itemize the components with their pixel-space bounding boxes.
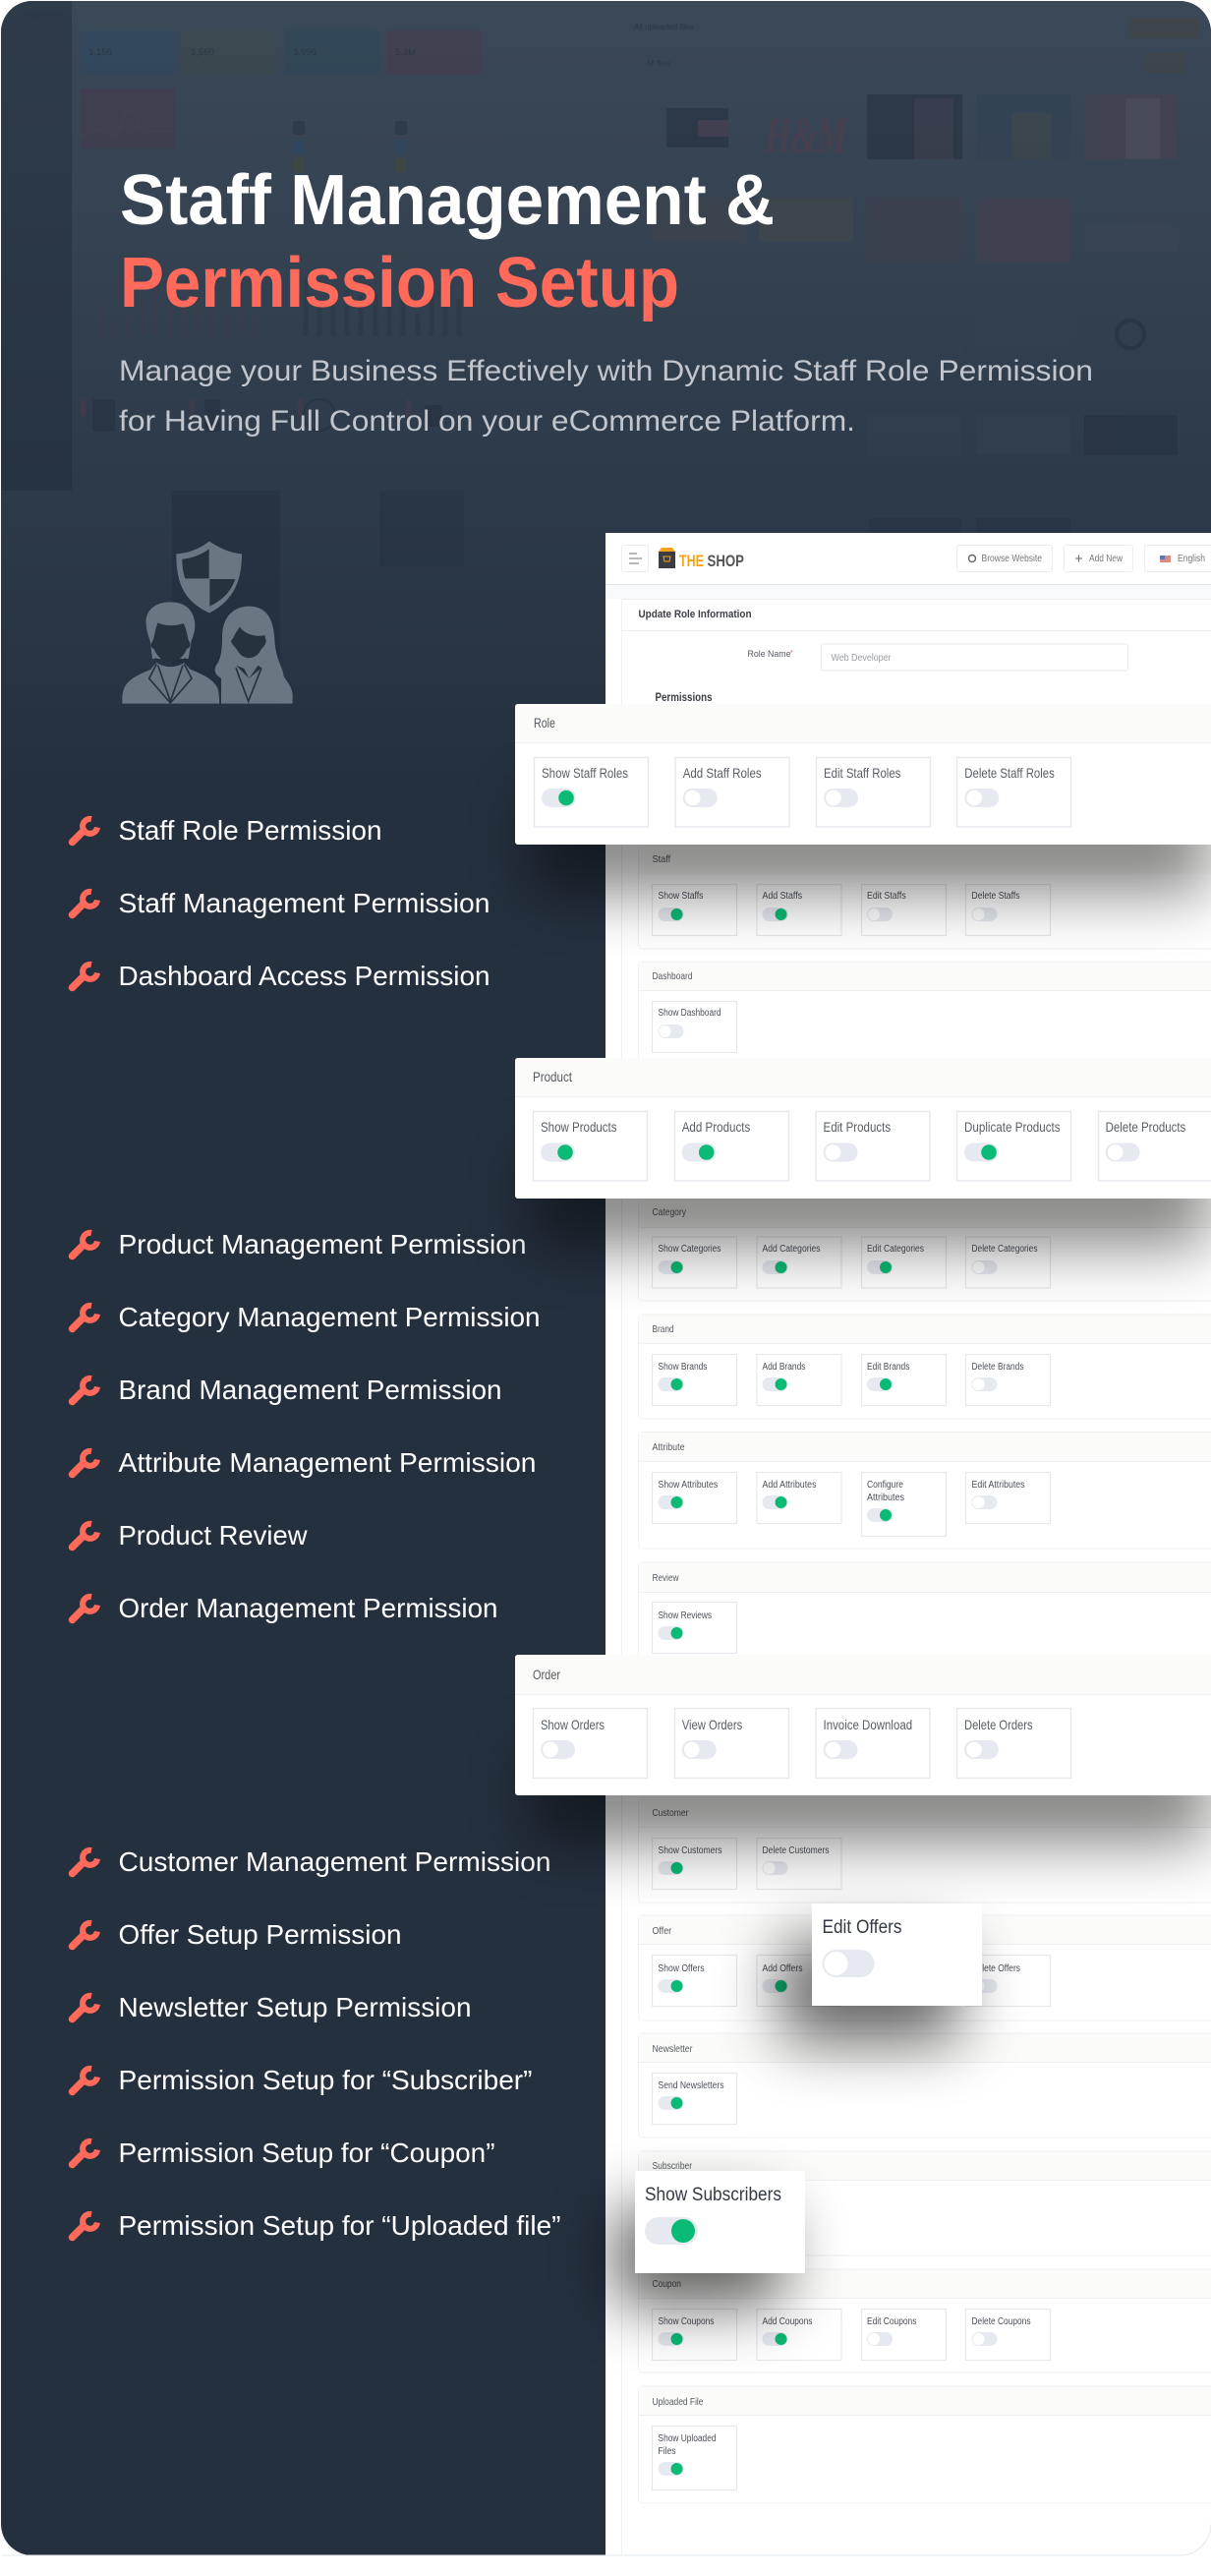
toggle: Delete Staffs: [965, 885, 1050, 936]
toggle: Add Staff Roles: Add Staff Roles: [683, 765, 762, 781]
section: Offer: Offer: [653, 1925, 672, 1937]
section: Newsletter: [639, 2033, 1211, 2137]
toggle: Edit Brands: Edit Brands: [867, 1362, 909, 1373]
toggle: Show Dashboard: [653, 1001, 737, 1052]
section: Newsletter: Newsletter: [653, 2043, 693, 2055]
toggle: Edit Staff Roles: [816, 757, 930, 827]
title: Staff Management &: [120, 161, 775, 240]
toggle: Edit Products: Edit Products: [824, 1119, 891, 1135]
toggle: Edit Staffs: [861, 885, 946, 936]
button: English: English: [1178, 554, 1205, 564]
field: Role Name: *: [790, 650, 793, 657]
toggle: Show Offers: Show Offers: [659, 1963, 704, 1974]
toggle: Add Offers: [757, 1955, 841, 2006]
card: Role: Role: [534, 715, 555, 731]
toggle: Edit Brands: [861, 1355, 946, 1406]
toggle: Show Products: [533, 1111, 647, 1181]
toggle: Show Orders: Show Orders: [541, 1717, 605, 1732]
toggle: Show Reviews: [653, 1603, 737, 1654]
title: [120, 161, 775, 322]
section: Dashboard: Dashboard: [653, 970, 693, 982]
item: Category Management Permission: Category Management Permission: [118, 1302, 541, 1332]
section: Customer: [639, 1798, 1211, 1903]
subtitle: for Having Full Control on your eCommerce Platform.: [119, 405, 855, 438]
faded uploaded files screenshot: All uploaded files: [634, 23, 693, 31]
subtitle: Manage your Business Effectively with Dynamic Staff Role Permission: [119, 355, 1093, 387]
item: Staff Management Permission: Staff Management Permission: [118, 888, 490, 918]
toggle: Edit Staff Roles: Edit Staff Roles: [824, 765, 900, 781]
toggle: Add Coupons: [757, 2309, 841, 2360]
section: Customer: Customer: [653, 1807, 689, 1819]
faded dashboard screenshot: 1,156: [88, 47, 112, 58]
panel: admin screenshot: [606, 533, 1211, 2555]
toggle: Delete Categories: Delete Categories: [971, 1244, 1038, 1255]
item: Permission Setup for Coupon: Permission Setup for “Coupon”: [118, 2137, 494, 2168]
toggle: Show Uploaded Files: Show Uploaded: [659, 2433, 716, 2444]
icon: staff with security shield: [122, 542, 293, 704]
toggle: Send Newsletters: Send Newsletters: [659, 2080, 723, 2091]
heading: Permissions: Permissions: [655, 692, 712, 704]
heading: Update Role Information: Update Role Information: [639, 609, 752, 620]
toggle: Delete Coupons: [965, 2309, 1050, 2360]
item: Dashboard Access Permission: Dashboard Access Permission: [118, 961, 490, 991]
faded dashboard screenshot: 1,560: [191, 47, 214, 58]
toggle: Delete Staff Roles: Delete Staff Roles: [964, 765, 1055, 781]
callout: Edit Offers: [812, 1903, 982, 2006]
section: Subscriber: Subscriber: [653, 2160, 692, 2172]
toggle: Configure Attributes: [861, 1473, 946, 1536]
card: Product: [515, 1058, 1211, 1199]
toggle: Invoice Download: [816, 1709, 930, 1778]
faded dashboard screenshot: [1, 1, 415, 488]
toggle: Show Customers: [653, 1839, 737, 1890]
toggle: Delete Orders: [957, 1709, 1071, 1778]
button: Browse Website: [957, 545, 1052, 572]
toggle: Add Products: Add Products: [682, 1119, 750, 1135]
toggle: Configure Attributes: Attributes: [867, 1493, 904, 1503]
toggle: Delete Customers: Delete Customers: [763, 1845, 830, 1856]
logo: [659, 548, 744, 570]
toggle: Add Products: [674, 1111, 788, 1181]
card: Order: [515, 1655, 1211, 1795]
button: Browse Website: Browse Website: [981, 554, 1042, 564]
faded uploaded files screenshot: [634, 18, 1198, 350]
toggle: Show Staff Roles: Show Staff Roles: [542, 765, 628, 781]
toggle: Delete Products: [1099, 1111, 1211, 1181]
toggle: Show Brands: [653, 1355, 737, 1406]
toggle: Show Reviews: Show Reviews: [659, 1610, 712, 1621]
section: Attribute: [639, 1432, 1211, 1549]
toggle: Delete Orders: Delete Orders: [964, 1717, 1033, 1732]
toggle: Duplicate Products: [957, 1111, 1071, 1181]
toggle: Delete Offers: Delete Offers: [971, 1963, 1020, 1974]
item: Offer Setup Permission: Offer Setup Permission: [118, 1919, 401, 1950]
toggle: Edit Categories: Edit Categories: [867, 1244, 924, 1255]
toggle: Edit Products: [816, 1111, 930, 1181]
feature list group 1: [73, 815, 490, 991]
field: Role Name: Web Developer: [832, 653, 892, 664]
toggle: Show Categories: Show Categories: [659, 1244, 721, 1255]
faded uploaded files screenshot: All files: [646, 59, 670, 68]
section: Dashboard: [638, 962, 1211, 1058]
feature list group 3: [73, 1846, 560, 2241]
faded uploaded files screenshot: H&M: [764, 108, 848, 164]
toggle: Show Customers: Show Customers: [659, 1845, 721, 1856]
item: Customer Management Permission: Customer Management Permission: [118, 1846, 550, 1877]
item: Permission Setup for Subscriber: Permission Setup for “Subscriber”: [118, 2065, 533, 2095]
toggle: Show Offers: [653, 1955, 737, 2006]
field: Role Name: [747, 644, 1128, 671]
toggle: Add Brands: Add Brands: [763, 1362, 806, 1373]
toggle: Show Attributes: Show Attributes: [659, 1480, 718, 1491]
item: Order Management Permission: Order Management Permission: [118, 1593, 498, 1623]
logo: THE: [679, 552, 704, 570]
toggle: Edit Categories: [861, 1237, 946, 1288]
section: Brand: Brand: [653, 1323, 674, 1335]
card: Product: Product: [533, 1069, 572, 1084]
toggle: Add Categories: [757, 1237, 841, 1288]
field: Role Name: Role Name: [747, 649, 790, 660]
callout: Show Subscribers: Show Subscribers: [645, 2185, 781, 2205]
toggle: Add Categories: Add Categories: [763, 1244, 820, 1255]
callout: Show Subscribers: [635, 2171, 805, 2273]
toggle: Add Staff Roles: [675, 757, 789, 827]
top bar: [606, 545, 1211, 585]
toggle: Delete Customers: [757, 1839, 841, 1890]
toggle: Show Coupons: [653, 2309, 737, 2360]
toggle: Edit Staffs: Edit Staffs: [867, 891, 906, 902]
toggle: Delete Offers: [965, 1955, 1050, 2006]
toggle: Show Brands: Show Brands: [659, 1362, 708, 1373]
card: Role: [515, 704, 1211, 845]
toggle: Add Staffs: Add Staffs: [763, 891, 802, 902]
toggle: Edit Coupons: [861, 2309, 946, 2360]
item: Permission Setup for Uploaded file: Permission Setup for “Uploaded file”: [118, 2210, 560, 2241]
toggle: Add Attributes: Add Attributes: [763, 1480, 816, 1491]
section: Review: Review: [653, 1572, 679, 1584]
toggle: Show Staffs: [653, 885, 737, 936]
toggle: Show Coupons: Show Coupons: [659, 2316, 714, 2327]
button: Add New: Add New: [1089, 554, 1124, 564]
toggle: Delete Staff Roles: [957, 757, 1071, 827]
toggle: Configure Attributes: Configure: [867, 1480, 903, 1491]
toggle: Add Brands: [757, 1355, 841, 1406]
section: Coupon: Coupon: [653, 2278, 681, 2290]
section: Review: [639, 1562, 1211, 1670]
toggle: Show Categories: [653, 1237, 737, 1288]
feature list group 2: [73, 1229, 541, 1623]
section: Brand: [639, 1315, 1211, 1419]
toggle: Show Orders: [533, 1709, 647, 1778]
item: Newsletter Setup Permission: Newsletter Setup Permission: [118, 1992, 472, 2022]
toggle: Show Dashboard: Show Dashboard: [659, 1008, 721, 1019]
toggle: Duplicate Products: Duplicate Products: [964, 1119, 1061, 1135]
subtitle: [119, 355, 1093, 438]
faded dashboard screenshot: 3,996: [293, 47, 317, 58]
section: Attribute: Attribute: [653, 1441, 685, 1453]
section: Offer: [639, 1915, 1211, 2020]
button: English: [1144, 545, 1211, 572]
toggle: Delete Brands: [965, 1355, 1050, 1406]
toggle: Show Staffs: Show Staffs: [659, 891, 704, 902]
toggle: Delete Coupons: Delete Coupons: [971, 2316, 1030, 2327]
toggle: Show Staff Roles: [535, 757, 649, 827]
item: Staff Role Permission: Staff Role Permission: [118, 815, 381, 846]
toggle: Send Newsletters: [653, 2073, 737, 2124]
button: Add New: [1064, 545, 1132, 572]
section: Coupon: [639, 2269, 1211, 2372]
toggle: Edit Attributes: [965, 1473, 1050, 1524]
faded dashboard screenshot: 5.3M: [395, 47, 416, 58]
toggle: Delete Categories: [965, 1237, 1050, 1288]
section: Uploaded File: Uploaded File: [653, 2396, 704, 2408]
section: Staff: Staff: [653, 853, 670, 865]
toggle: Show Attributes: [653, 1473, 737, 1524]
toggle: Add Offers: Add Offers: [763, 1963, 802, 1974]
toggle: Edit Coupons: Edit Coupons: [867, 2316, 916, 2327]
title: Permission Setup: [120, 244, 679, 322]
section: Category: [639, 1199, 1211, 1301]
card: Order: Order: [533, 1667, 560, 1682]
callout: Edit Offers: Edit Offers: [822, 1917, 902, 1938]
toggle: Delete Products: Delete Products: [1106, 1119, 1185, 1135]
toggle: Show Uploaded Files: [653, 2427, 737, 2489]
toggle: Add Staffs: [757, 885, 841, 936]
toggle: Show Products: Show Products: [541, 1119, 617, 1135]
item: Brand Management Permission: Brand Management Permission: [118, 1375, 501, 1405]
item: Attribute Management Permission: Attribute Management Permission: [118, 1447, 537, 1478]
toggle: Add Coupons: Add Coupons: [763, 2316, 812, 2327]
toggle: View Orders: View Orders: [682, 1717, 742, 1732]
toggle: View Orders: [674, 1709, 788, 1778]
toggle: Add Attributes: [757, 1473, 841, 1524]
item: Product Review: Product Review: [118, 1520, 308, 1551]
item: Product Management Permission: Product Management Permission: [118, 1229, 527, 1259]
section: Subscriber: [639, 2151, 1211, 2255]
toggle: Delete Brands: Delete Brands: [971, 1362, 1024, 1373]
section: Uploaded File: [639, 2386, 1211, 2503]
faded dashboard screenshot: THE SHOP: [25, 11, 62, 20]
section: Category: Category: [653, 1206, 687, 1218]
toggle: Invoice Download: Invoice Download: [824, 1717, 912, 1732]
toggle: Edit Attributes: Edit Attributes: [971, 1480, 1024, 1491]
toggle: Show Uploaded Files: Files: [659, 2446, 676, 2457]
toggle: Delete Staffs: Delete Staffs: [971, 891, 1020, 902]
section: Staff: [639, 845, 1211, 949]
logo: SHOP: [708, 552, 744, 570]
